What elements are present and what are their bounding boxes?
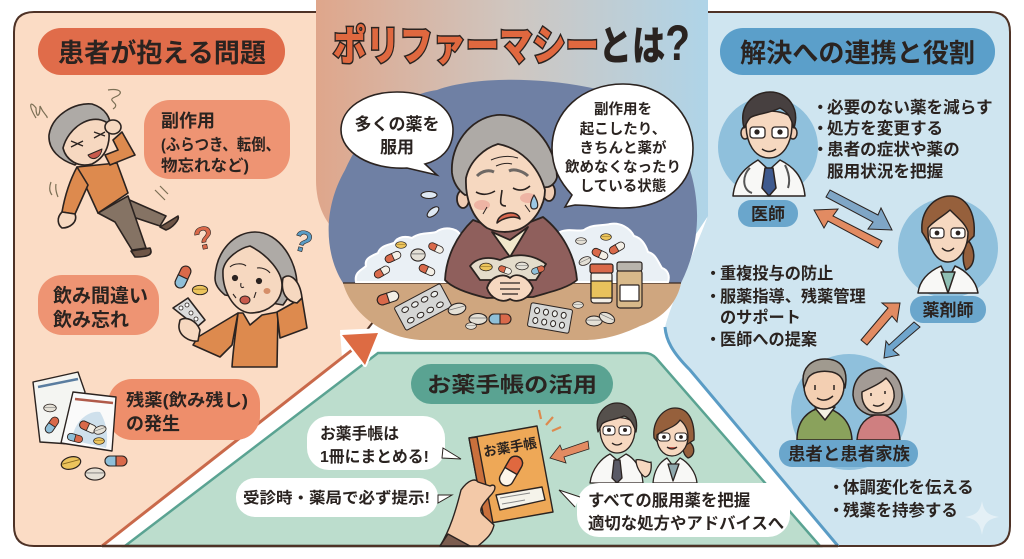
speech bubble: many medicines: 多くの薬を [354,114,440,134]
question mark orange: ? [191,218,217,258]
torso [77,163,128,213]
panel: notebook use [125,353,820,546]
callout: leftover medicine: の発生 [126,414,180,434]
glasses [750,127,788,138]
speech bubble: adverse effects state: 起こしたり、 [580,121,666,138]
callout: wrong or missed doses [38,275,159,335]
doctor body [590,454,643,483]
patient and family [791,354,907,470]
callout: grasp all meds [559,483,790,537]
patient role list: 体調変化を伝える [843,478,974,497]
arrow: doctor to pharmacist [826,190,892,230]
doctor role list: ・ [812,119,829,138]
woman face detail [871,391,885,406]
central illustration blob [329,80,697,283]
label: pharmacist: 薬剤師 [922,301,974,320]
doctor role list: 処方を変更する [827,118,943,138]
torso [445,217,577,298]
hand [58,212,76,228]
face [746,111,792,158]
callout: grasp all meds: 適切な処方やアドバイスへ [588,514,784,533]
doctor tie [612,460,622,483]
doctor role list: 服用状況を把握 [827,162,944,181]
doctor [718,92,818,197]
hair back [215,232,297,305]
dizzy marks [31,90,168,200]
hair [49,104,110,165]
ear right [543,183,555,201]
cheek mark [264,288,270,294]
doctor role list: 必要のない薬を減らす [827,98,993,117]
pills held [480,262,545,275]
stethoscope [744,165,789,193]
blister pack right [527,303,573,333]
cheeks [474,193,536,210]
blister [173,298,205,327]
pill bottle labelled [617,262,642,308]
heading: notebook [411,364,613,404]
white separator: lower centre [102,326,838,546]
pharmacist role list [705,264,866,349]
panel outline: orange diagonal edge [102,350,352,546]
label: doctor: 医師 [751,205,785,224]
callout: side effects: 副作用 [161,111,215,131]
callout: grasp all meds: すべての服用薬を把握 [588,491,750,510]
pharmacist ponytail [683,440,694,458]
patient role list: ・ [828,479,844,497]
doctor role list: ・ [812,98,829,117]
man body [797,407,852,440]
smile [762,149,776,152]
man face [804,363,844,409]
gesturing hand [636,460,651,477]
bottom border [102,545,838,547]
left arm [62,167,88,214]
hair back [922,196,974,245]
tie [762,168,776,196]
pharmacist role list: ・ [705,265,721,283]
leg back [118,198,166,226]
label: patient and family: 患者と患者家族 [788,444,911,464]
pharmacist role list: 医師への提案 [720,331,817,349]
shoe [160,216,178,230]
ear left [741,127,749,139]
callout: one notebook: お薬手帳は [320,424,399,443]
heading: patient problems: 患者が抱える問題 [58,38,266,68]
right sleeve [277,298,307,338]
eyebrows [477,170,528,176]
pile of pills left [356,228,460,282]
panel: solutions background [665,12,1010,546]
speech bubble: adverse effects state: 副作用を [594,101,652,118]
torso [232,312,278,367]
doctor face [600,418,635,453]
panel outline: solutions border [700,12,1010,546]
callout: side effects: (ふらつき、転倒、 [161,135,280,154]
pharmacist role list: ・ [705,288,721,306]
smile [942,248,954,251]
ear right [789,127,797,139]
doctor role list: 患者の症状や薬の [827,140,960,159]
callout: one notebook: 1冊にまとめる! [320,448,429,466]
book title: お薬手帳 [482,434,538,460]
notebook sparkle marks [539,410,561,431]
sleeve [440,534,470,546]
pharmacist glasses [658,433,687,441]
pharmacist inner [668,464,679,481]
sweat drops [421,192,441,219]
eyes [71,132,105,147]
label: doctor [738,200,798,227]
woman hair [853,368,902,415]
right arm [105,132,135,165]
brows [230,264,270,298]
face [63,119,109,165]
left sleeve [193,313,238,357]
pharmacist smile [667,447,677,449]
panel: patient problems background [14,12,390,546]
pill [497,454,525,488]
lines [500,493,530,504]
hand holding blister [179,318,200,341]
doctor smile [612,443,622,445]
hands [487,275,533,301]
loose pills under bags [60,455,127,480]
collar [815,407,835,420]
blister pack left [394,283,452,331]
eye left [233,276,237,280]
label: pharmacist [910,296,986,323]
pharmacist role list: 服薬指導、残薬管理 [720,287,866,306]
patient role list [828,478,974,520]
hand holding notebook [440,480,495,546]
pile of pills right [560,224,669,282]
glasses [930,228,965,238]
man hair [803,359,846,388]
woman face [862,378,894,413]
title: ポリファーマシーとは? [333,15,690,71]
panel: centre title band [316,0,708,270]
blister holes [179,303,198,321]
mouth [240,296,250,304]
doctor hair [597,403,637,432]
face [223,246,282,313]
heading: notebook: お薬手帳の活用 [427,374,597,397]
doctor glasses [603,426,631,435]
sparkle [965,501,999,535]
pharmacist face [657,420,688,456]
pharmacist role list: 重複投与の防止 [720,264,833,283]
label: patient and family [779,440,918,467]
doctor and pharmacist mini [590,403,697,483]
face [466,144,545,232]
loose pills near woman [173,264,208,295]
illustration: leftover medicine bags [33,372,116,451]
man face detail [815,385,834,400]
question mark blue: ? [290,224,316,260]
inner [941,272,955,293]
heading: patient problems [38,28,285,75]
collar [492,227,528,257]
arrow: pharmacist to doctor [814,209,882,248]
arrow: problems to centre [342,333,378,365]
pills on table [376,290,616,329]
panel outline: blue diagonal edge [665,327,838,546]
arrow: pharmacist to patient [884,322,920,358]
fingers [500,283,520,294]
ponytail [963,240,974,270]
doctor role list [812,98,993,181]
doctor role list: ・ [812,140,829,159]
face [928,210,968,262]
pharmacist role list: ・ [705,331,721,349]
callout: leftover medicine [108,379,260,440]
speech bubble: adverse effects state: している状態 [580,177,667,195]
speech bubble: adverse effects state: 飲めなくなったり [565,158,681,176]
speech bubble: many medicines [341,92,453,175]
callout: leftover medicine: 残薬(飲み残し) [126,390,248,410]
pharmacist body [653,458,697,483]
tear [531,195,538,209]
speech bubble: adverse effects state [552,84,693,208]
hair [452,115,557,195]
callout: always show: 受診時・薬局で必ず提示! [243,488,430,507]
callout: wrong or missed doses: 飲み忘れ [53,309,129,331]
coat [918,266,978,293]
eye right [257,279,261,283]
illustration: dizzy fallen woman [49,104,178,257]
mouth [497,213,520,223]
callout: side effects: 物忘れなど) [161,157,249,175]
label [496,487,545,510]
speech bubble: adverse effects state: きちんと薬が [580,139,667,157]
callout: side effects [144,100,290,179]
shoe 2 [131,248,151,257]
heading: collaboration and roles [720,28,995,75]
spine [469,437,493,524]
elderly woman crying [445,115,577,301]
features [476,156,530,214]
speech bubble: many medicines: 服用 [380,138,414,157]
callout: wrong or missed doses: 飲み間違い [53,284,148,307]
pharmacist hair [654,408,694,445]
hair [743,92,796,128]
arrow: staff to notebook [550,441,589,463]
woman body [857,414,900,440]
callout: one notebook [307,416,461,470]
mouth [88,149,102,159]
pill bottle yellow [590,264,613,303]
pills in hands [470,255,546,280]
arrow: patient to pharmacist [861,303,900,345]
medicine notebook [469,426,553,524]
pharmacist role list: のサポート [720,309,801,327]
table line [343,282,681,284]
leg front [98,196,146,250]
patient role list: 残薬を持参する [843,501,958,520]
white gutter: right of centre [640,218,707,330]
patient role list: ・ [828,502,844,520]
table [343,283,681,340]
coat [733,160,805,196]
pharmacist [898,196,998,298]
hand at head [105,120,121,134]
callout: always show [236,478,452,517]
illustration: confused woman [173,232,307,367]
heading: collaboration and roles: 解決への連携と役割 [740,38,975,68]
ear left [457,190,469,208]
hand at head [282,276,302,303]
